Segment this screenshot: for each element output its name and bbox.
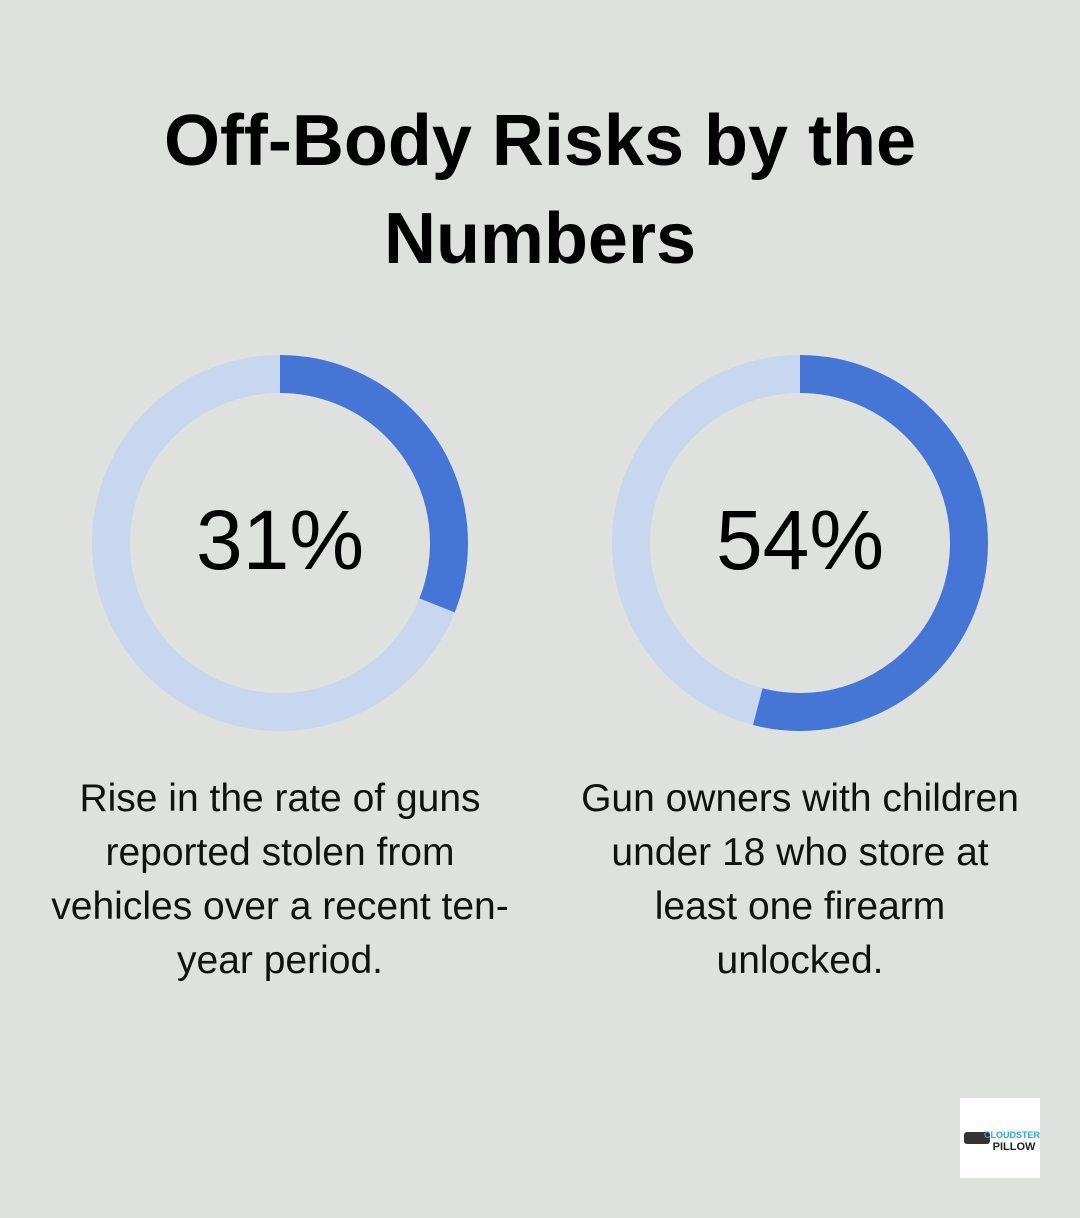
- donut 54%: 54%: [716, 493, 884, 587]
- title: Off-Body Risks by the: [164, 101, 916, 181]
- text: right description: unlocked.: [717, 939, 883, 982]
- text: left description: [51, 777, 509, 982]
- text: left description: year period.: [177, 939, 383, 982]
- text: left description: Rise in the rate of guns: [79, 777, 481, 820]
- chart: donuts: [92, 355, 988, 731]
- text: right description: under 18 who store at: [611, 831, 989, 874]
- logo: [960, 1098, 1040, 1178]
- text: left description: vehicles over a recent ten-: [51, 885, 509, 928]
- donut 31%: 31%: [196, 493, 364, 587]
- logo: CLOUDSTER: [984, 1130, 1040, 1140]
- logo: PILLOW: [993, 1141, 1036, 1153]
- title: [164, 101, 916, 279]
- text: right description: least one firearm: [655, 885, 945, 928]
- text: right description: [581, 777, 1019, 982]
- text: left description: reported stolen from: [105, 831, 454, 874]
- donut 31%: [111, 374, 449, 712]
- title: Numbers: [384, 199, 696, 279]
- donut 54%: [631, 374, 969, 712]
- text: right description: Gun owners with children: [581, 777, 1019, 820]
